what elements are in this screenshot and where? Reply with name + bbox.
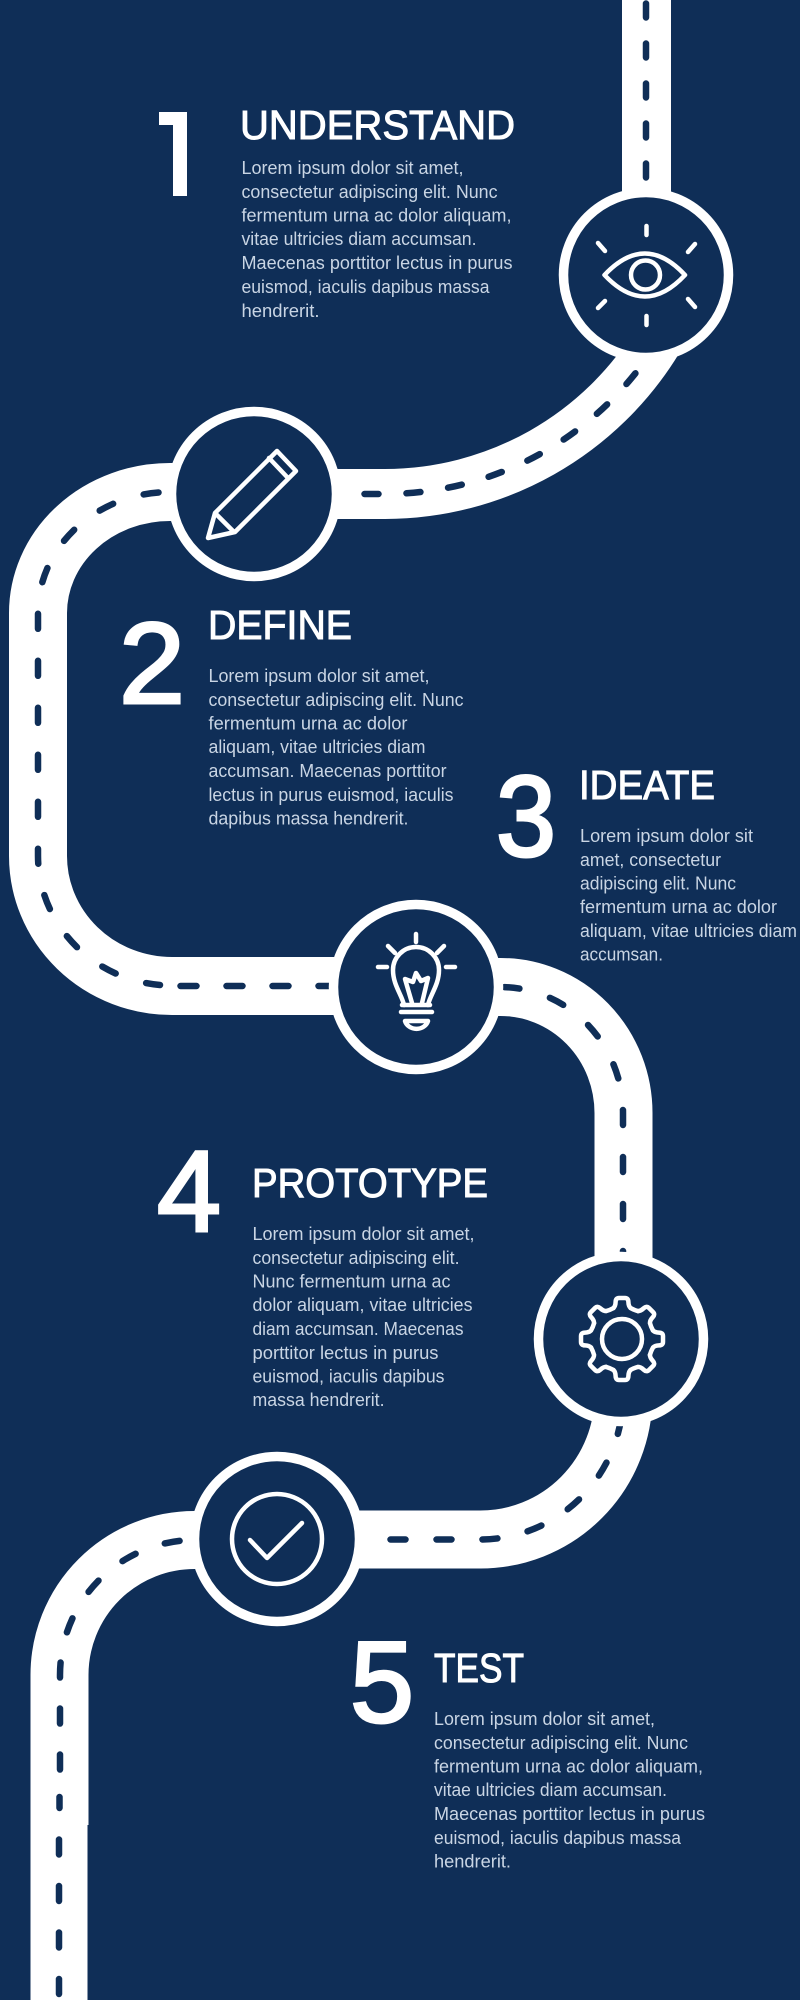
body text: dolor aliquam, vitae ultricies — [252, 1295, 472, 1315]
body text: vitae ultricies diam accumsan. — [242, 229, 476, 249]
step 3: ideate — [496, 753, 797, 964]
number 1: 1 — [149, 93, 213, 221]
body text: euismod, iaculis dapibus massa — [242, 277, 490, 297]
icon: check mark — [194, 1456, 360, 1622]
body text: dapibus massa hendrerit. — [208, 808, 408, 828]
body text: Lorem ipsum dolor sit — [580, 826, 753, 846]
body text: Lorem ipsum dolor sit amet, — [252, 1224, 474, 1244]
body text: aliquam, vitae ultricies diam — [580, 921, 797, 941]
body text: diam accumsan. Maecenas — [252, 1319, 464, 1339]
body text: Maecenas porttitor lectus in purus — [434, 1804, 705, 1824]
body text: adipiscing elit. Nunc — [580, 874, 736, 894]
body text: accumsan. — [580, 944, 663, 964]
body text: Lorem ipsum dolor sit amet, — [242, 158, 464, 178]
body text: Lorem ipsum dolor sit amet, — [434, 1709, 655, 1729]
body text: hendrerit. — [242, 301, 320, 321]
body text: fermentum urna ac dolor — [208, 714, 408, 734]
body text — [252, 1224, 474, 1410]
heading: UNDERSTAND — [240, 102, 515, 148]
body text: lectus in purus euismod, iaculis — [208, 785, 454, 805]
body text: massa hendrerit. — [252, 1390, 384, 1410]
number 4: 4 — [157, 1128, 221, 1256]
body text: Nunc fermentum urna ac — [252, 1272, 450, 1292]
step 4: prototype — [157, 1128, 488, 1410]
body text — [208, 666, 464, 828]
body text: fermentum urna ac dolor — [580, 897, 777, 917]
heading: IDEATE — [579, 762, 715, 808]
body text: Lorem ipsum dolor sit amet, — [208, 666, 430, 686]
body text — [242, 158, 512, 321]
body text: accumsan. Maecenas porttitor — [208, 761, 446, 781]
winding road — [38, 0, 658, 2000]
body text: euismod, iaculis dapibus massa — [434, 1828, 682, 1848]
icon: eye — [564, 192, 728, 358]
body text: hendrerit. — [434, 1852, 511, 1872]
body text: fermentum urna ac dolor aliquam, — [434, 1756, 703, 1776]
heading: TEST — [434, 1645, 524, 1691]
step 5: test — [350, 1619, 705, 1872]
body text: aliquam, vitae ultricies diam — [208, 737, 426, 757]
body text: fermentum urna ac dolor aliquam, — [242, 206, 512, 226]
icon: light bulb — [334, 904, 498, 1070]
body text: consectetur adipiscing elit. — [252, 1248, 460, 1268]
heading: PROTOTYPE — [252, 1160, 488, 1206]
body text — [434, 1709, 705, 1872]
number 3: 3 — [496, 753, 556, 881]
heading: DEFINE — [208, 602, 352, 648]
number 5: 5 — [350, 1619, 414, 1747]
icon: gear — [538, 1256, 704, 1422]
body text: consectetur adipiscing elit. Nunc — [434, 1733, 688, 1753]
body text: Maecenas porttitor lectus in purus — [242, 253, 512, 273]
number 2: 2 — [119, 600, 185, 728]
body text: vitae ultricies diam accumsan. — [434, 1780, 667, 1800]
step 1: understand — [159, 110, 514, 317]
body text: consectetur adipiscing elit. Nunc — [208, 690, 464, 710]
body text: consectetur adipiscing elit. Nunc — [242, 182, 498, 202]
step 2: define — [119, 600, 464, 828]
body text: amet, consectetur — [580, 850, 721, 870]
number 1 — [159, 112, 187, 196]
icon: pencil — [172, 412, 336, 576]
road centre dashes — [38, 4, 646, 2000]
body text: euismod, iaculis dapibus — [252, 1366, 444, 1386]
body text: porttitor lectus in purus — [252, 1343, 438, 1363]
body text — [580, 826, 797, 964]
